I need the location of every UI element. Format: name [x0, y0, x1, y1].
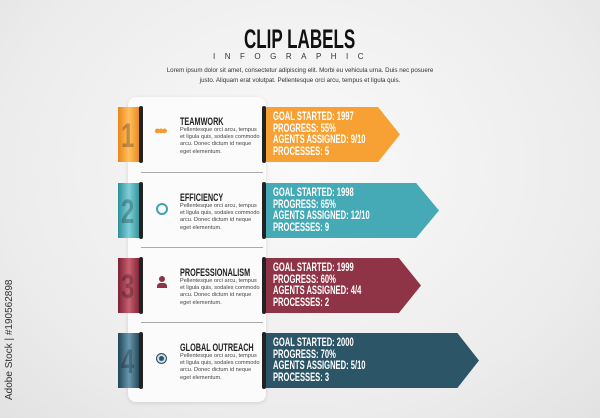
arrow 3: GOAL STARTED: 1999 [273, 262, 354, 274]
row 4: global outreach [118, 332, 479, 389]
heading global outreach: GLOBAL OUTREACH [180, 342, 254, 354]
arrow 2: PROCESSES: 9 [273, 222, 329, 234]
tab 1: 1 [121, 117, 134, 155]
desc: Pellentesque orci arcu, tempus et ligula quis, sodales commodo arcu. Donec dictum id neque eget elementum. [180, 278, 260, 306]
heading professionalism: PROFESSIONALISM [180, 267, 250, 279]
arrow 4: PROCESSES: 3 [273, 372, 329, 384]
watermark side text: Adobe Stock | #190562898 [4, 280, 15, 400]
tab 4: 4 [121, 343, 134, 381]
arrow 3 [263, 258, 421, 313]
tab 3 [118, 258, 140, 313]
tab 2 [118, 183, 140, 238]
arrow 1: PROCESSES: 5 [273, 146, 329, 158]
arrow 2: AGENTS ASSIGNED: 12/10 [273, 210, 370, 222]
heading efficiency: EFFICIENCY [180, 192, 223, 204]
tab 4 [118, 333, 140, 388]
card panel [128, 97, 266, 402]
desc: Pellentesque orci arcu, tempus et ligula quis, sodales commodo arcu. Donec dictum id neque eget elementum. [180, 353, 260, 381]
arrow 4: AGENTS ASSIGNED: 5/10 [273, 360, 366, 372]
desc: Pellentesque orci arcu, tempus et ligula quis, sodales commodo arcu. Donec dictum id neque eget elementum. [180, 127, 260, 155]
arrow 3: AGENTS ASSIGNED: 4/4 [273, 285, 361, 297]
arrow 1 [263, 107, 400, 162]
desc: Pellentesque orci arcu, tempus et ligula quis, sodales commodo arcu. Donec dictum id neque eget elementum. [180, 203, 260, 231]
arrow 1: AGENTS ASSIGNED: 9/10 [273, 134, 366, 146]
tab 2: 2 [121, 193, 134, 231]
heading teamwork: TEAMWORK [180, 116, 224, 128]
row 2: efficiency [118, 182, 439, 239]
row 1: teamwork [118, 106, 400, 163]
arrow 4: PROGRESS: 70% [273, 348, 336, 360]
arrow 1: PROGRESS: 55% [273, 122, 336, 134]
arrow 3: PROCESSES: 2 [273, 296, 329, 308]
arrow 4: GOAL STARTED: 2000 [273, 337, 354, 349]
tab 3: 3 [121, 268, 134, 306]
icon: person [157, 276, 167, 288]
arrow 2 [263, 183, 439, 238]
arrow 4 [263, 333, 479, 388]
title: CLIP LABELS [244, 24, 355, 54]
subtitle: INFOGRAPHIC [213, 52, 373, 61]
arrow 1: GOAL STARTED: 1997 [273, 111, 354, 123]
arrow 2: PROGRESS: 65% [273, 198, 336, 210]
intro text: Lorem ipsum dolor sit amet, consectetur adipiscing elit. Morbi eu vehicula urna. Duis nec posuere justo. Aliquam erat volutpat. Pellentesque orci arcu, tempus et ligula quis. [167, 67, 433, 84]
arrow 2: GOAL STARTED: 1998 [273, 187, 354, 199]
arrow 3: PROGRESS: 60% [273, 274, 336, 286]
icon: clock [156, 203, 168, 215]
icon: globe [156, 353, 167, 364]
tab 1 [118, 107, 140, 162]
icon: people: ●●● [154, 125, 165, 137]
row 3: professionalism [118, 257, 421, 314]
